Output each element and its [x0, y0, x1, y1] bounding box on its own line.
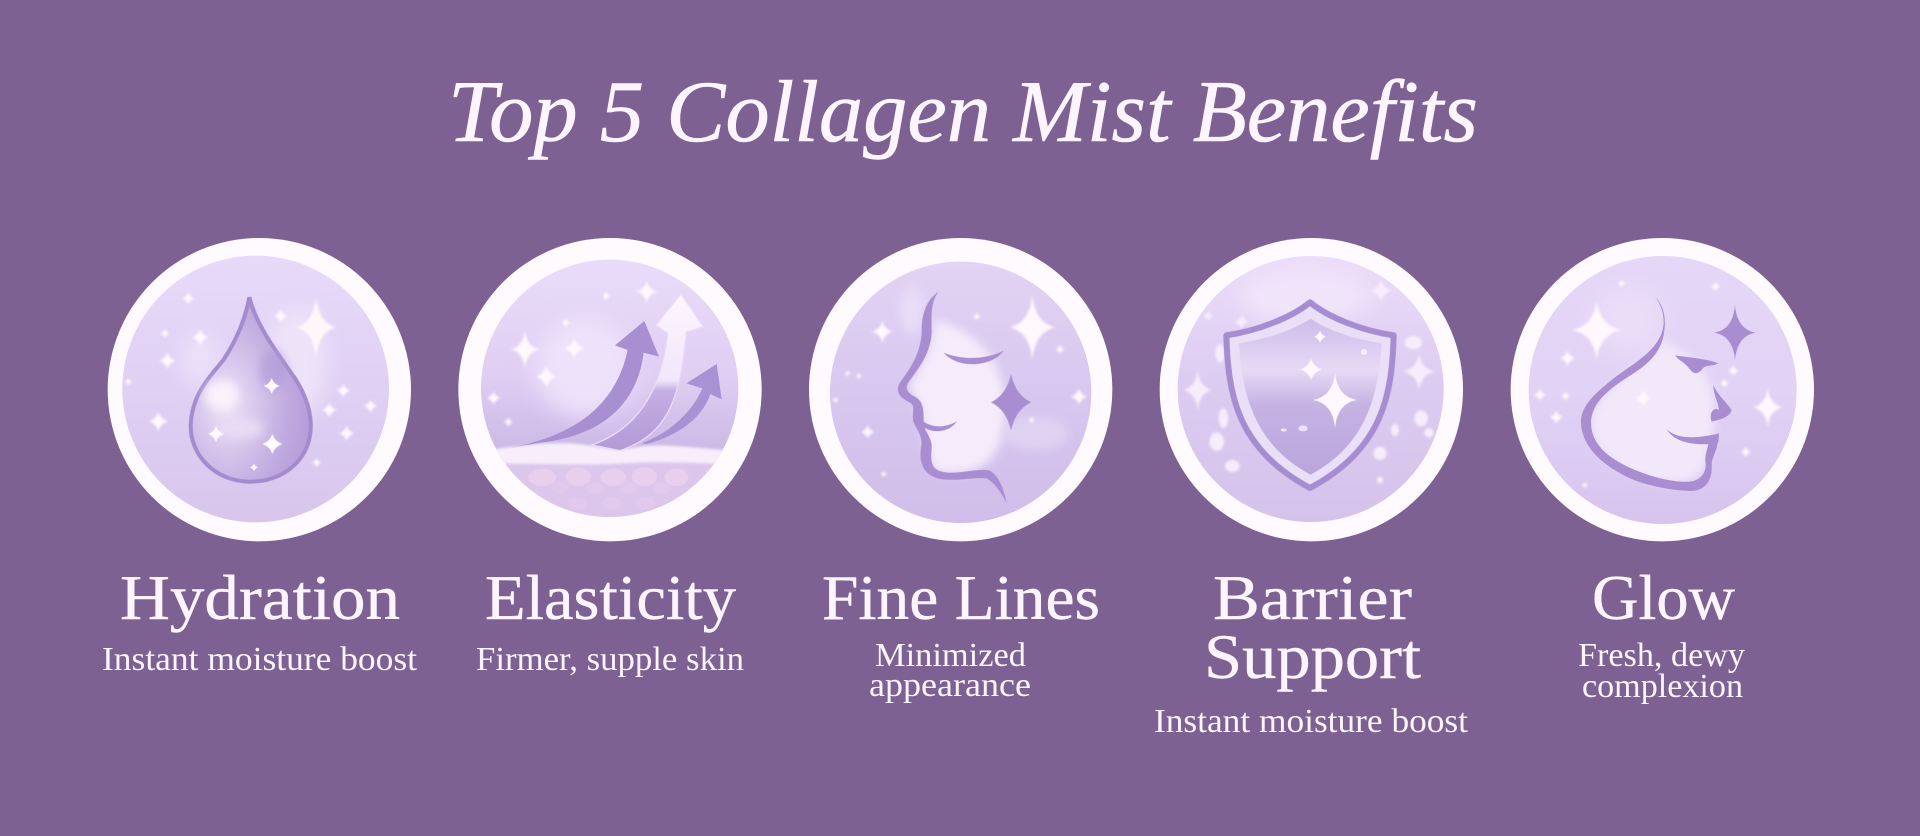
description: Firmer, supple skin [476, 641, 744, 678]
panel: elasticity [458, 238, 762, 678]
head outline [1581, 297, 1718, 491]
description: Minimized [875, 637, 1026, 674]
eye [943, 351, 1004, 364]
shield inner plate [1239, 319, 1382, 475]
description: complexion [1582, 668, 1743, 705]
title: Top 5 Collagen Mist Benefits [448, 64, 1478, 161]
sparkle: dark star [991, 374, 1031, 430]
description: Fresh, dewy [1578, 637, 1745, 674]
heading: Barrier Support: Support [1204, 621, 1421, 692]
mouth [921, 419, 957, 431]
icon: rising arrows over skin [458, 238, 762, 541]
arrow: middle white [592, 294, 703, 451]
face outline [898, 292, 1007, 503]
heading: Glow: Glow [1592, 562, 1735, 633]
arrow: right [642, 364, 722, 444]
heading: Hydration: Hydration [120, 562, 400, 633]
panel: fine lines [809, 238, 1112, 704]
description: Instant moisture boost [102, 641, 418, 678]
nose [1711, 385, 1732, 422]
heading: Barrier Support: Barrier [1213, 562, 1412, 633]
description [1578, 637, 1745, 705]
icon: water drop [108, 238, 411, 541]
mouth [1667, 429, 1719, 444]
shield body [1226, 302, 1394, 488]
eye [1675, 355, 1718, 373]
icon: glowing face [1511, 238, 1814, 541]
icon: face profile with sparkles [809, 238, 1112, 541]
panel: barrier support [1154, 238, 1469, 740]
description [869, 637, 1031, 704]
arrow: left [512, 321, 659, 447]
panel: hydration [102, 238, 418, 678]
infographic canvas [103, 78, 1814, 732]
heading: Elasticity: Elasticity [485, 562, 736, 633]
description: appearance [869, 667, 1031, 704]
sparkle: dark star [1714, 305, 1756, 360]
description: Instant moisture boost [1154, 703, 1469, 740]
heading: Barrier Support [1204, 562, 1421, 692]
icon: shield [1160, 238, 1463, 541]
panel: glow [1511, 238, 1814, 705]
heading: Fine Lines: Fine Lines [822, 562, 1100, 633]
